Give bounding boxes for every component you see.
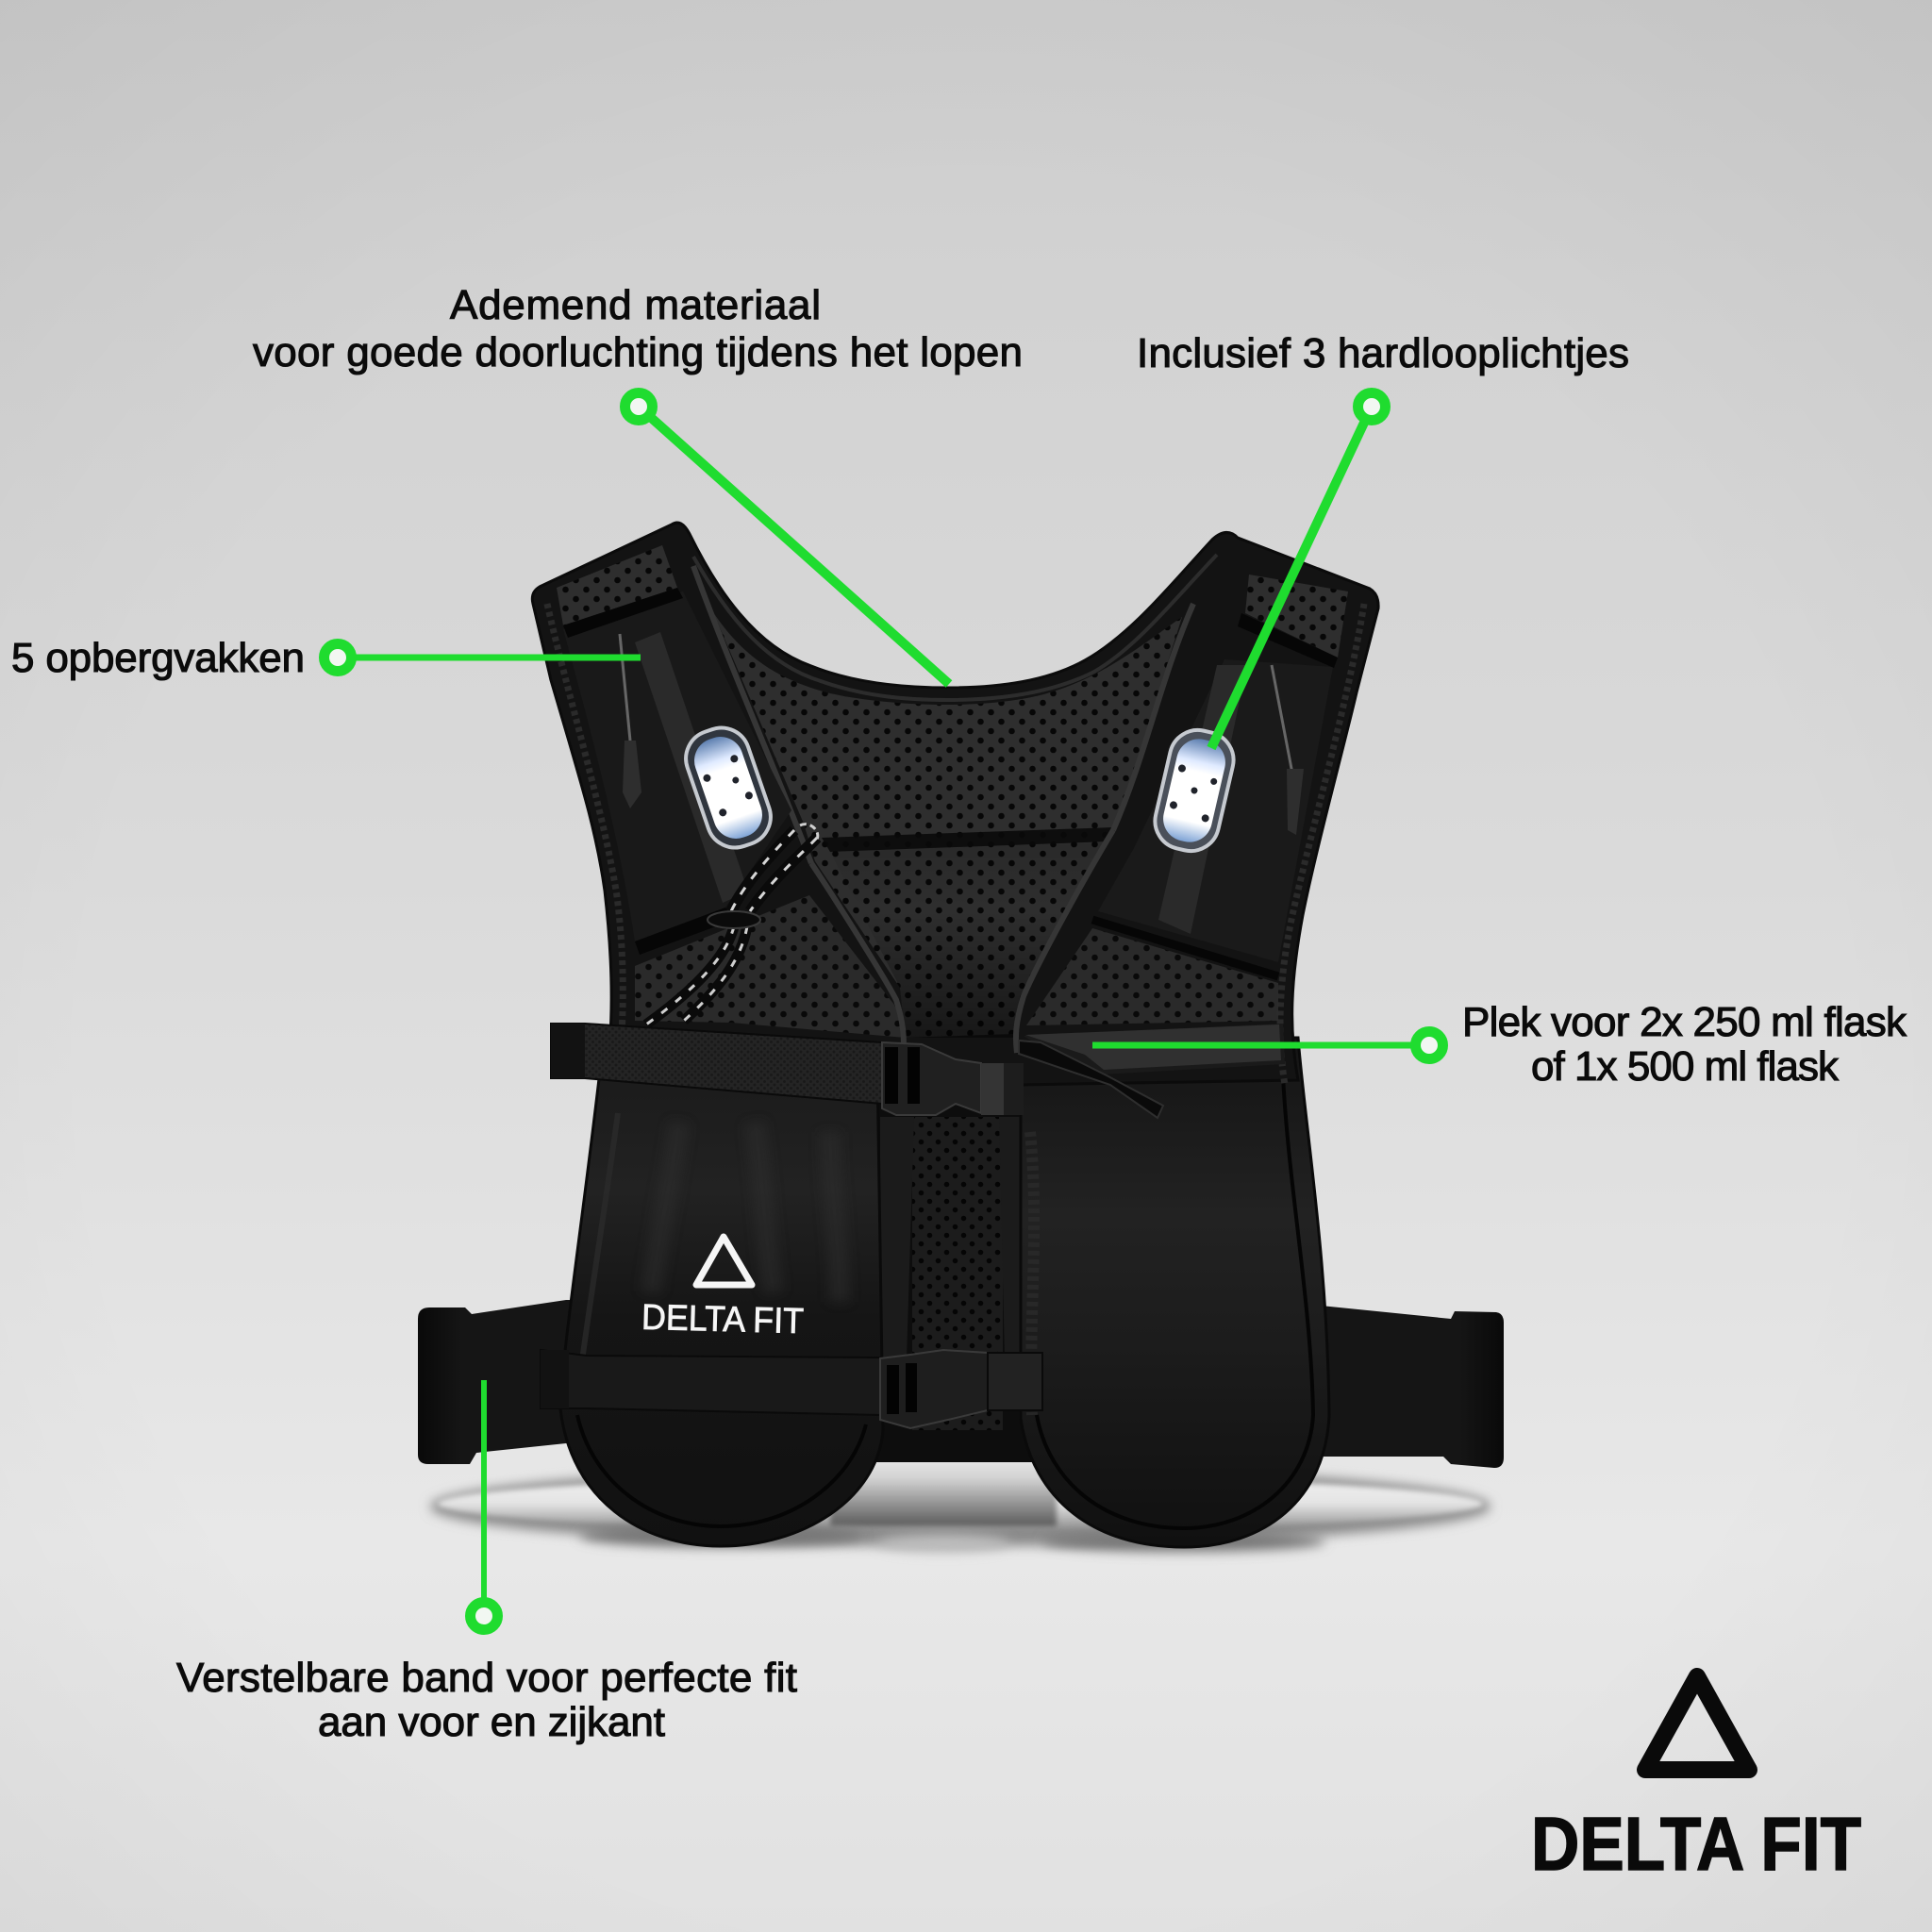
binding seams [693, 566, 1193, 1053]
leader line [325, 643, 641, 672]
label text: 5 opbergvakken [11, 635, 305, 681]
label text: Plek voor 2x 250 ml flask [1462, 999, 1907, 1045]
heading text: Ademend materiaal [450, 282, 821, 328]
upper vest body [532, 523, 1378, 1085]
label text: of 1x 500 ml flask [1531, 1043, 1840, 1090]
elastic cord [646, 824, 818, 1024]
neck binding highlight [693, 555, 1217, 700]
left shoulder perforated patch [557, 545, 677, 625]
label text: Inclusief 3 hardlooplichtjes [1137, 330, 1629, 376]
floor shadow [430, 1453, 1491, 1552]
centre mesh panel [713, 612, 1182, 1038]
chest strap [551, 1024, 882, 1104]
leader line [1092, 1032, 1443, 1058]
label text [176, 1655, 797, 1745]
vest logo: DELTA FIT [641, 1298, 805, 1341]
left upper pocket [563, 588, 791, 955]
label text: aan voor en zijkant [318, 1699, 665, 1745]
waist strap [541, 1350, 880, 1415]
heading text: voor goede doorluchting tijdens het lopen [253, 329, 1023, 375]
heading text [253, 282, 1023, 375]
callout: adjustable strap [176, 1380, 797, 1745]
lower left mesh [635, 895, 906, 1038]
chest buckle [882, 1042, 1024, 1115]
central lower mesh [873, 1085, 1042, 1462]
lower right mesh [1026, 928, 1278, 1025]
right lower pocket panel [1021, 1038, 1329, 1547]
brand name: DELTA FIT [1531, 1802, 1861, 1886]
leader line [625, 392, 949, 684]
callout: running lights [1137, 330, 1629, 748]
product: running vest [418, 523, 1504, 1547]
left safety light [678, 720, 778, 856]
leader line [1211, 392, 1385, 748]
callout: breathable material [253, 282, 1023, 684]
label text: Verstelbare band voor perfecte fit [176, 1655, 797, 1701]
stitched outer edges [547, 604, 1364, 1085]
icon: triangle [1645, 1676, 1749, 1770]
right upper pocket [1092, 613, 1338, 976]
waist buckle [880, 1350, 1042, 1428]
callout: storage pockets [11, 635, 641, 681]
leader line [470, 1380, 498, 1630]
callout: flask space [1092, 999, 1907, 1090]
label text [1462, 999, 1907, 1090]
right safety light [1149, 724, 1240, 857]
vest logo [641, 1237, 805, 1341]
left lower pocket panel [560, 1038, 883, 1546]
chest zip pocket [1019, 1024, 1285, 1118]
brand logo [1531, 1676, 1861, 1886]
right shoulder perforated patch [1245, 575, 1348, 658]
waist belt [418, 1300, 1504, 1468]
